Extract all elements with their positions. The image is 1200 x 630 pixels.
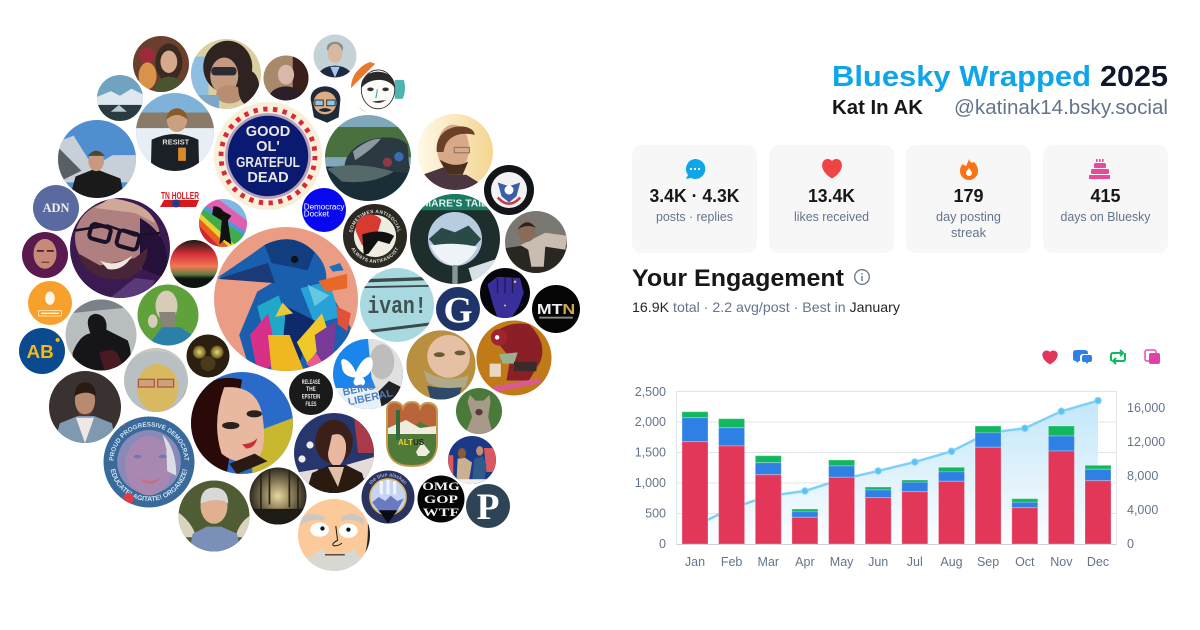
avatar: Release the Epstein Files [289, 371, 333, 415]
stat card: day posting streak: day posting [936, 210, 1001, 224]
icon: likes [1043, 351, 1057, 364]
avatar: woman in sunglasses [191, 39, 261, 109]
avatar: red costume on bike [476, 320, 552, 396]
avatar: Mare's Tail sign [410, 194, 500, 284]
avatar: woman in resist sweater [136, 93, 214, 171]
avatar: colorful raven [214, 227, 358, 371]
month labels: Jul [907, 555, 923, 569]
avatar: woman with cat [133, 36, 189, 92]
avatar: MTN: MTN [537, 302, 575, 318]
left axis labels: 2,000 [635, 415, 666, 429]
avatar: older man smiling [178, 480, 250, 552]
stat card: days on Bluesky: 415 [1090, 186, 1121, 206]
icon: info [855, 270, 869, 284]
avatar: Proud Progressive Democrat: EDUCATE! AGITATE! ORGANIZE! [110, 468, 188, 502]
avatar: smiling man with glasses [70, 198, 170, 298]
right axis labels: 16,000 [1127, 401, 1165, 415]
user handle: @katinak14.bsky.social [954, 97, 1168, 119]
month labels: Feb [721, 555, 742, 569]
avatar: ivan!: ivan! [367, 294, 427, 321]
avatar: snowy mountains [97, 75, 143, 121]
avatar: Release the Epstein Files: RELEASE [302, 380, 320, 386]
avatar: ADN: ADN [43, 201, 69, 215]
month labels: Aug [940, 555, 963, 569]
logo: TN Holler: TN HOLLER [161, 190, 199, 202]
right axis labels: 4,000 [1127, 503, 1158, 517]
month labels: Sep [977, 555, 999, 569]
avatar: bald man [264, 56, 308, 100]
stat card: days on Bluesky: days on Bluesky [1060, 210, 1151, 224]
avatar: hooded figure [66, 300, 136, 370]
icon: quotes [1145, 350, 1160, 364]
icon: reposts [1111, 350, 1125, 364]
stat card: likes received: likes received [794, 210, 869, 224]
avatar: ivan! [360, 268, 434, 342]
area: cumulative total [695, 401, 1098, 544]
month labels: Nov [1050, 555, 1073, 569]
avatar: The Blue Alaskan [362, 470, 414, 524]
avatar: Being Liberal [333, 339, 403, 409]
avatar: P logo: P [477, 487, 499, 528]
avatar: antifascist orca badge [343, 204, 407, 268]
logo: TN Holler [160, 190, 199, 208]
icon: cake [1089, 159, 1110, 179]
avatar: man in suit, grey hair [314, 34, 356, 78]
month labels: Apr [795, 555, 815, 569]
right axis labels: 0 [1127, 537, 1134, 551]
avatar: Democracy Docket: Democracy [304, 203, 345, 212]
avatar: OMG GOP WTF: WTF [423, 506, 459, 519]
avatar: cap on dashboard [325, 115, 411, 201]
icon: replies [1073, 350, 1092, 364]
avatar: man in front of glacier [58, 120, 136, 198]
chart: monthly engagement [635, 385, 1165, 569]
month labels: May [830, 555, 854, 569]
avatar: Being Liberal: BEING [342, 380, 377, 399]
left axis labels: 1,500 [635, 446, 666, 460]
avatar: Release the Epstein Files: FILES [306, 402, 317, 408]
avatar: woman with American flag [294, 413, 374, 493]
avatar: AB [19, 328, 65, 374]
month labels: Mar [758, 555, 779, 569]
left axis labels: 500 [645, 506, 666, 520]
avatar: antifascist orca badge: SOMETIMES ANTISOCIAL [349, 210, 401, 232]
avatar: OMG GOP WTF [418, 476, 464, 522]
stacked bars [682, 412, 1111, 544]
avatar: painted old man [124, 348, 188, 412]
right axis labels: 12,000 [1127, 435, 1165, 449]
stat card: likes received [769, 145, 894, 253]
line: cumulative total [695, 397, 1101, 526]
avatar: Mare's Tail sign: MARE'S TAIL [423, 199, 487, 210]
month labels: Jun [868, 555, 888, 569]
heading: Your Engagement: Your Engagement [632, 265, 844, 292]
avatar: OMG GOP WTF: GOP [424, 493, 458, 506]
avatar: Alt US National Park Service badge [387, 402, 437, 466]
avatar: forest sunset [250, 468, 306, 524]
avatar: Good Ol' Grateful Dead badge: DEAD [247, 170, 289, 186]
stat card: posts and replies: posts · replies [656, 210, 733, 224]
avatar: Good Ol' Grateful Dead badge: OL' [256, 139, 280, 155]
avatar: aurora [170, 240, 218, 288]
avatar: G logo: G [443, 291, 473, 332]
avatar: Democracy Docket: Docket [304, 210, 330, 219]
avatar: bearded man in glasses [417, 114, 493, 190]
avatar: Release the Epstein Files: EPSTEIN [302, 394, 320, 400]
avatar: Proud Progressive Democrat [104, 416, 194, 508]
avatar: cartoon woman [351, 61, 406, 115]
avatar: grumpy cartoon man [298, 499, 370, 571]
title: 2025 [1100, 61, 1168, 93]
avatar: Release the Epstein Files: THE [306, 387, 316, 393]
engagement summary: 16.9K total · 2.2 avg/post · Best in January [632, 299, 900, 315]
stat card: posts and replies: 3.4K · 4.3K [650, 186, 740, 206]
avatar: glowing eyes [186, 334, 230, 378]
month labels: Dec [1087, 555, 1109, 569]
avatar: two figures shaking hands [448, 436, 496, 484]
left axis labels [635, 385, 666, 551]
icon: speech bubble [686, 159, 705, 179]
avatar: illustrated grey-bearded man [138, 284, 198, 346]
stat card: days on Bluesky [1043, 145, 1168, 253]
avatar: man reclining [505, 211, 567, 273]
avatar: Alt US National Park Service badge: ALT [398, 438, 413, 447]
avatar: woman in resist sweater: RESIST [162, 137, 190, 146]
icon: flame [960, 159, 978, 180]
avatar: P logo [466, 484, 510, 528]
avatar cluster [19, 34, 580, 571]
title: Bluesky Wrapped [832, 61, 1091, 93]
avatar: DHS seal [484, 165, 534, 215]
avatar: blonde woman with scarf [406, 330, 476, 400]
avatar: cartoon man with glasses [310, 86, 340, 123]
left axis labels: 0 [659, 537, 666, 551]
month labels: Oct [1015, 555, 1035, 569]
stat card: posts and replies [632, 145, 757, 253]
avatar: Good Ol' Grateful Dead badge: GRATEFUL [236, 155, 300, 171]
stat card: day posting streak: 179 [953, 186, 984, 206]
left axis labels: 2,500 [635, 385, 666, 399]
avatar: Good Ol' Grateful Dead badge [214, 102, 322, 210]
avatar: Good Ol' Grateful Dead badge: GOOD [246, 124, 290, 140]
avatar: Proud Progressive Democrat: PROUD PROGRESSIVE DEMOCRAT [109, 422, 189, 461]
avatar: Alaska flag fist [480, 268, 530, 318]
stat card: day posting streak [906, 145, 1031, 253]
user name: Kat In AK [832, 97, 924, 119]
right axis labels [1127, 401, 1165, 551]
avatar: Democracy Docket [302, 188, 346, 232]
month labels [685, 555, 1109, 569]
avatar: MTN [532, 285, 580, 333]
avatar: Being Liberal: LIBERAL [347, 387, 394, 408]
avatar: rainbow silhouette [199, 199, 247, 247]
avatar: The Blue Alaskan: the blue alaskan [369, 473, 406, 484]
avatar: Alt US National Park Service badge: US [413, 438, 425, 447]
month labels: Jan [685, 555, 705, 569]
avatar: lynx [456, 388, 502, 434]
stat card: day posting streak: streak [951, 226, 987, 240]
avatar: AB: AB [27, 341, 54, 362]
legend icons [1043, 350, 1160, 364]
left axis labels: 1,000 [635, 476, 666, 490]
avatar: ADN [33, 185, 79, 231]
stat card: likes received: 13.4K [808, 186, 855, 206]
right axis labels: 8,000 [1127, 469, 1158, 483]
icon: heart [823, 160, 841, 178]
avatar: man in blue blazer [49, 371, 121, 443]
avatar: OMG GOP WTF: OMG [422, 480, 460, 493]
avatar: G logo [436, 287, 480, 332]
avatar: antifascist orca badge: ALWAYS ANTIFASCIST [351, 247, 398, 263]
avatar: Al Jazeera [28, 281, 72, 325]
avatar: woman purple hood [22, 232, 68, 278]
avatar: woman with Ukraine flag [191, 372, 293, 474]
